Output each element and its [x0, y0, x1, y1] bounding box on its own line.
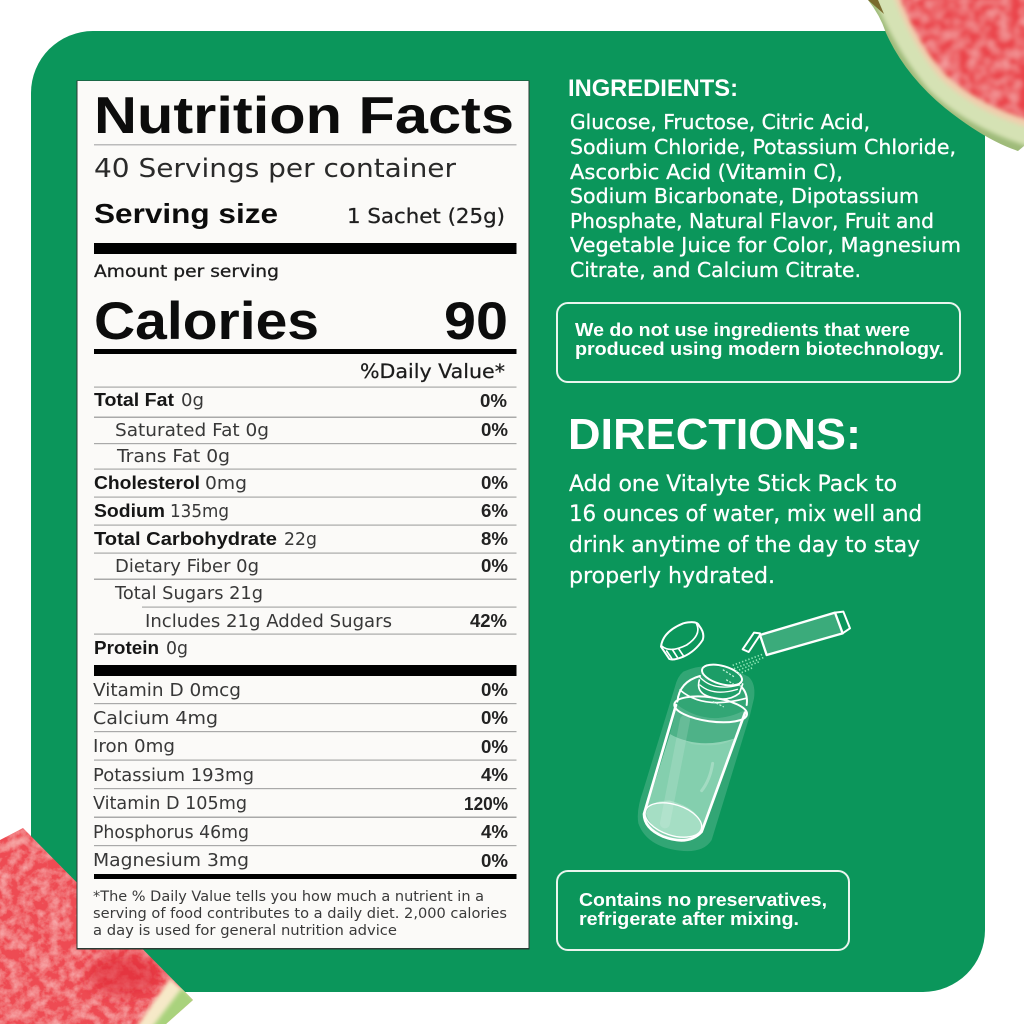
- image: watermelon slice bottom left: [0, 820, 200, 1024]
- calories row: Calories: [94, 292, 319, 351]
- calories row: 90: [444, 292, 508, 351]
- row: total fat: [94, 389, 507, 411]
- footnote: *The % Daily Value tells you how much a nutrient in a: [93, 889, 484, 905]
- row: dietary fiber: Dietary Fiber 0g: [115, 557, 259, 577]
- callout: no preservatives note: Contains no preservatives,: [579, 890, 827, 910]
- row: phosphorus: Phosphorus 46mg: [93, 823, 249, 843]
- image: watermelon slice top right: [868, 0, 1024, 151]
- text block: directions: drink anytime of the day to stay: [569, 533, 920, 558]
- serving size row: Serving size: [94, 198, 278, 229]
- footnote: serving of food contributes to a daily diet. 2,000 calories: [93, 906, 507, 922]
- icon: falling powder: [733, 654, 764, 674]
- icon: bottle cap: [661, 622, 703, 659]
- text block: ingredients list: Sodium Bicarbonate, Dipotassium: [570, 184, 919, 208]
- footnote: [93, 889, 507, 939]
- text block: directions: [569, 472, 922, 589]
- row: potassium: [93, 765, 508, 786]
- row: total carbohydrate: Total Carbohydrate: [94, 528, 277, 549]
- row: iron: [93, 737, 508, 757]
- row: total carbohydrate: 8%: [481, 529, 508, 549]
- row: sodium: 6%: [481, 501, 508, 521]
- row: iron: Iron 0mg: [93, 737, 175, 757]
- row: dietary fiber: 0%: [481, 556, 508, 576]
- row: cholesterol: 0%: [481, 473, 508, 493]
- text block: directions: Add one Vitalyte Stick Pack to: [569, 472, 897, 497]
- row: total carbohydrate: 22g: [284, 530, 317, 550]
- serving size row: [94, 198, 505, 229]
- callout: biotechnology note: produced using modern biotechnology.: [575, 339, 944, 359]
- row: dietary fiber: [115, 556, 508, 577]
- text block: ingredients list: Ascorbic Acid (Vitamin C),: [570, 160, 843, 184]
- row: saturated fat: [115, 420, 508, 441]
- text block: ingredients list: [570, 110, 961, 282]
- row: cholesterol: 0mg: [205, 474, 247, 494]
- row: potassium: Potassium 193mg: [93, 766, 254, 786]
- footnote: a day is used for general nutrition advice: [93, 923, 397, 939]
- row: total fat: Total Fat: [94, 389, 174, 410]
- row: total fat: 0%: [480, 391, 507, 411]
- panel: nutrition facts label: [76, 80, 530, 950]
- text block: directions: properly hydrated.: [569, 564, 775, 589]
- text block: directions: 16 ounces of water, mix well and: [569, 502, 922, 527]
- heading: ingredients: INGREDIENTS:: [568, 75, 738, 102]
- row: magnesium: 0%: [481, 851, 508, 871]
- row: sodium: 135mg: [170, 502, 229, 522]
- callout: no preservatives note: [557, 871, 849, 950]
- row: added sugars: 42%: [470, 611, 507, 631]
- row: vitamin D: 0%: [481, 680, 508, 700]
- row: saturated fat: 0%: [481, 420, 508, 440]
- row: cholesterol: Cholesterol: [94, 472, 200, 493]
- calories row: [94, 292, 508, 351]
- row: total sugars: Total Sugars 21g: [114, 584, 263, 604]
- row: added sugars: [145, 611, 507, 632]
- row: saturated fat: Saturated Fat 0g: [115, 421, 269, 441]
- row: sodium: [94, 500, 508, 522]
- text block: ingredients list: Vegetable Juice for Color, Magnesium: [570, 233, 961, 257]
- row: sodium: Sodium: [94, 500, 165, 521]
- icon: bottle: [638, 661, 754, 851]
- illustration: bottle, cap and stick pack: [638, 612, 850, 851]
- row: protein: 0g: [166, 639, 188, 659]
- text block: ingredients list: Citrate, and Calcium Citrate.: [570, 258, 861, 282]
- row: calcium: Calcium 4mg: [93, 709, 218, 729]
- row: protein: [94, 637, 188, 659]
- serving size row: 1 Sachet (25g): [347, 204, 505, 228]
- row: protein: Protein: [94, 637, 159, 658]
- row: calcium: 0%: [481, 708, 508, 728]
- row: calcium: [93, 708, 508, 729]
- row: magnesium: [93, 851, 508, 871]
- row: phosphorus: 4%: [481, 822, 508, 842]
- row: total fat: 0g: [181, 391, 204, 411]
- row: total carbohydrate: [94, 528, 508, 550]
- servings per container: 40 Servings per container: [94, 154, 456, 184]
- row: vitamin D: [93, 680, 508, 701]
- daily value header: %Daily Value*: [360, 360, 505, 383]
- row: vitamin D 105mg: 120%: [464, 794, 508, 814]
- row: added sugars: Includes 21g Added Sugars: [145, 612, 392, 632]
- amount per serving: Amount per serving: [94, 262, 279, 281]
- callout: biotechnology note: We do not use ingredients that were: [575, 320, 910, 340]
- row: iron: 0%: [481, 737, 508, 757]
- icon: stick pack: [743, 612, 850, 655]
- heading: directions: DIRECTIONS:: [568, 410, 861, 459]
- text block: ingredients list: Phosphate, Natural Flavor, Fruit and: [570, 209, 934, 233]
- callout: biotechnology note: [557, 303, 960, 382]
- row: vitamin D 105mg: [93, 794, 508, 814]
- row: vitamin D 105mg: Vitamin D 105mg: [93, 794, 247, 814]
- row: vitamin D: Vitamin D 0mcg: [93, 681, 241, 701]
- row: potassium: 4%: [481, 765, 508, 785]
- row: trans fat: Trans Fat 0g: [116, 447, 230, 467]
- heading: Nutrition Facts: Nutrition Facts: [94, 87, 514, 145]
- row: magnesium: Magnesium 3mg: [93, 851, 249, 871]
- row: cholesterol: [94, 472, 508, 494]
- text block: ingredients list: Sodium Chloride, Potassium Chloride,: [570, 135, 956, 159]
- row: phosphorus: [93, 822, 508, 843]
- callout: no preservatives note: refrigerate after mixing.: [579, 909, 799, 929]
- text block: ingredients list: Glucose, Fructose, Citric Acid,: [570, 110, 870, 134]
